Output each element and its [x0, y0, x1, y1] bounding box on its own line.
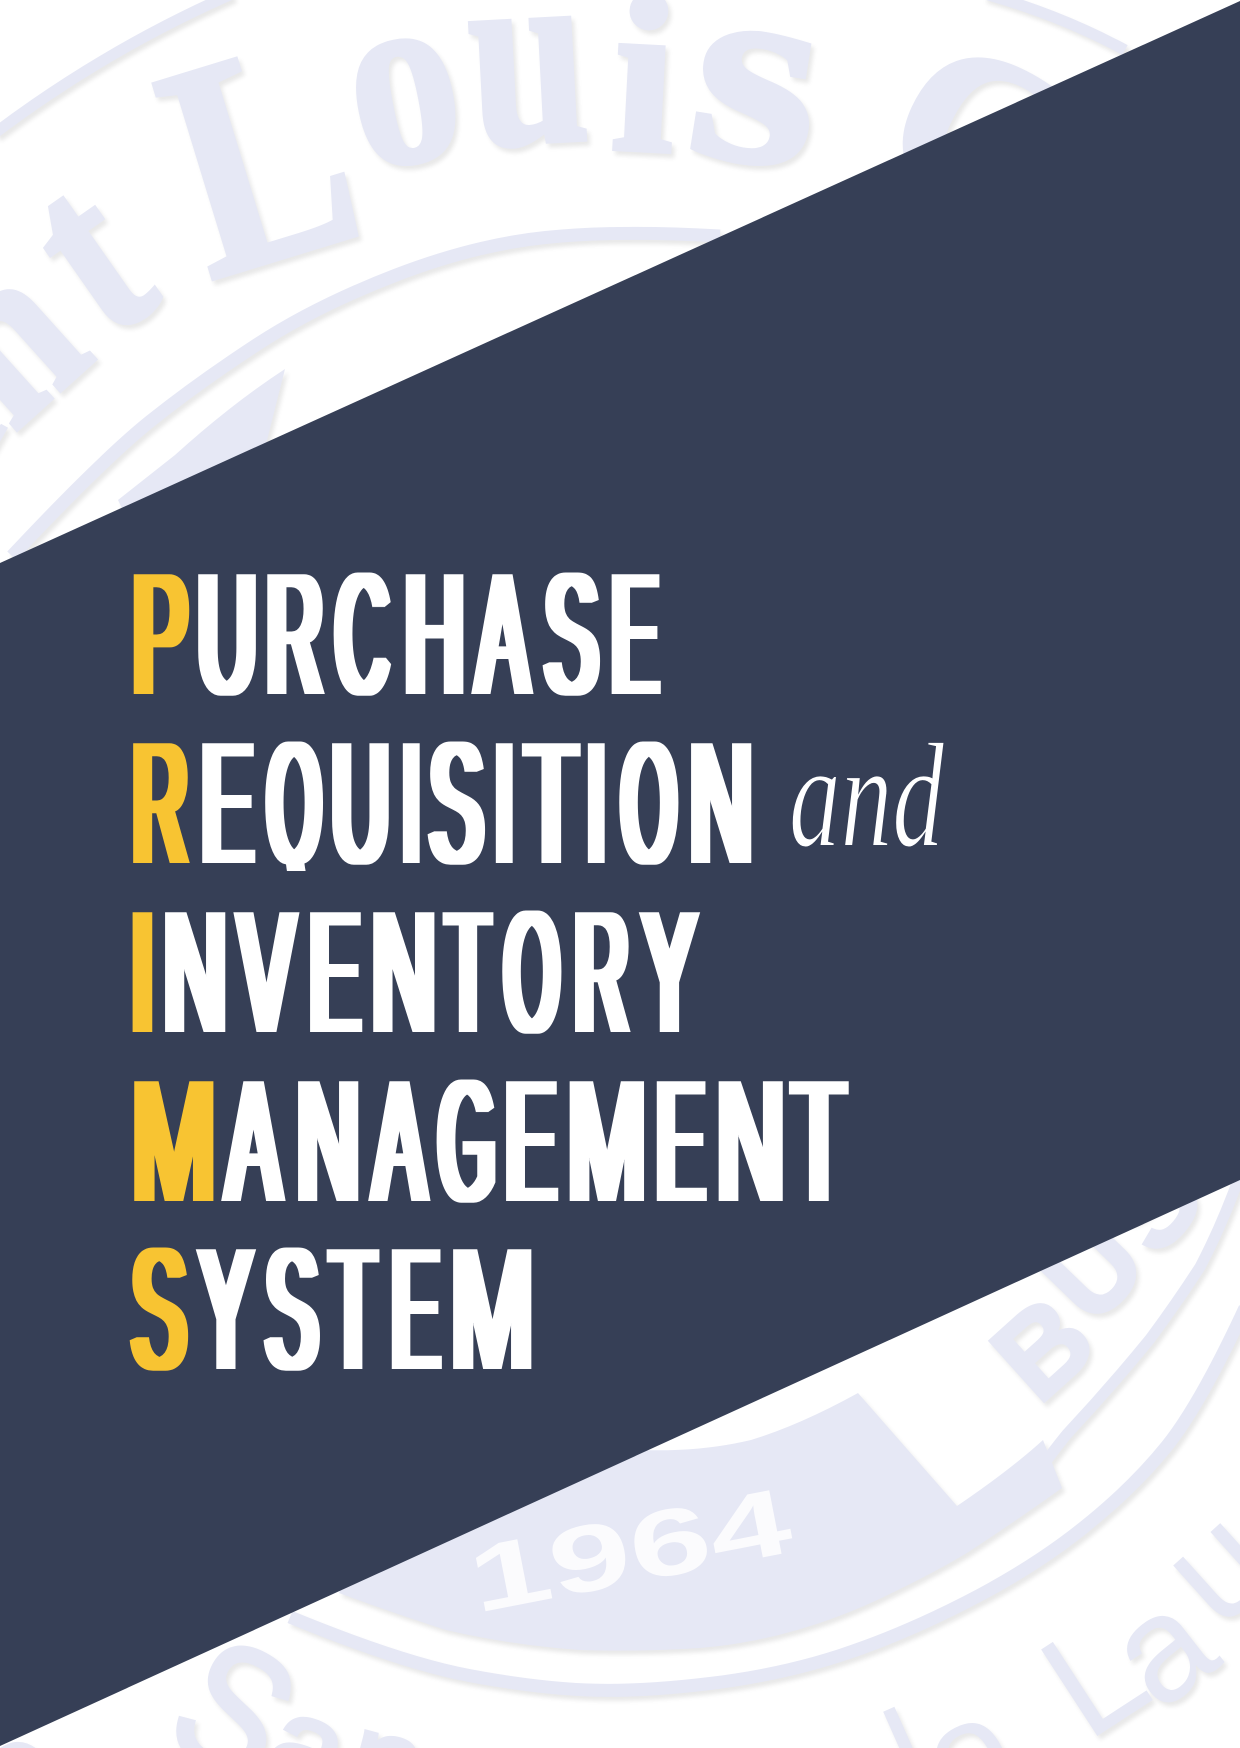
title line: Management: T: [793, 1043, 845, 1238]
title line: Inventory: Y: [643, 874, 696, 1069]
seal lettering: business: S: [1076, 1132, 1228, 1277]
title line: Management: G: [439, 1043, 495, 1238]
title line: Requisition: S: [430, 705, 482, 900]
title line: Management: E: [656, 1043, 703, 1238]
seal: inner ring: [12, 233, 720, 556]
title line: Requisition: [133, 705, 752, 900]
seal: outer ring top: [0, 0, 1125, 133]
title line: Management: A: [227, 1043, 280, 1238]
title line: Requisition: T: [526, 705, 577, 900]
seal: right inner ring: [1040, 1175, 1240, 1470]
seal lettering: San Pablo Laguna: a: [1075, 1555, 1240, 1739]
seal lettering: business: B: [967, 1271, 1119, 1426]
title line: Requisition: O: [622, 705, 675, 900]
title line: Inventory: R: [575, 874, 628, 1069]
seal: year 1964: 1964: [460, 1468, 799, 1633]
title line: Inventory: N: [164, 874, 226, 1069]
title line: Purchase: A: [477, 536, 528, 731]
title line: Requisition: I: [497, 705, 512, 900]
title line: System: [130, 1211, 533, 1406]
seal: wedge ornament: [118, 369, 285, 525]
title line: Purchase: [133, 536, 661, 731]
title line: Management: [132, 1043, 849, 1238]
title line: Management: N: [717, 1043, 784, 1238]
title line: Requisition: N: [690, 705, 752, 900]
seal lettering: business: [988, 1199, 1201, 1406]
title line: Purchase: U: [198, 536, 256, 731]
title: [130, 572, 944, 1371]
title line: Inventory: [131, 874, 700, 1069]
title line: Management: M: [132, 1043, 215, 1238]
seal lettering: business: U: [1016, 1194, 1170, 1347]
title line: System: M: [451, 1211, 533, 1406]
title line: Purchase: S: [544, 536, 597, 731]
title line: Purchase: H: [404, 536, 464, 731]
title line: Requisition: I: [404, 705, 418, 900]
seal lettering: San Pablo Laguna: [0, 1523, 1240, 1748]
title line: Purchase: C: [336, 536, 388, 731]
title line: Purchase: R: [267, 536, 322, 731]
seal lettering: Saint Louis College: [0, 0, 1110, 472]
title line: Management: N: [296, 1043, 359, 1238]
script word: and: and: [789, 713, 945, 879]
title line: Requisition: R: [133, 705, 187, 900]
seal: crescent panel: [339, 1393, 1062, 1651]
title line: System: S: [132, 1211, 186, 1406]
title line: Management: E: [506, 1043, 556, 1238]
title line: Requisition: E: [202, 705, 253, 900]
title line: Management: A: [374, 1043, 425, 1238]
title line: System: E: [392, 1211, 438, 1406]
title line: Inventory: T: [447, 874, 489, 1069]
title line: Purchase: E: [612, 536, 657, 731]
title line: Requisition: Q: [268, 705, 320, 900]
title line: Purchase: P: [133, 536, 187, 731]
title line: Inventory: O: [505, 874, 558, 1069]
title line: System: S: [266, 1211, 317, 1406]
title line: Inventory: I: [131, 874, 154, 1069]
title line: Inventory: E: [310, 874, 360, 1069]
seal: lower ring: [290, 1308, 1240, 1690]
title line: Inventory: N: [372, 874, 436, 1069]
title line: System: Y: [200, 1211, 252, 1406]
title line: Inventory: V: [239, 874, 294, 1069]
title line: Requisition: U: [332, 705, 389, 900]
title line: System: T: [331, 1211, 375, 1406]
title line: Requisition: I: [589, 705, 604, 900]
title line: Management: M: [568, 1043, 646, 1238]
